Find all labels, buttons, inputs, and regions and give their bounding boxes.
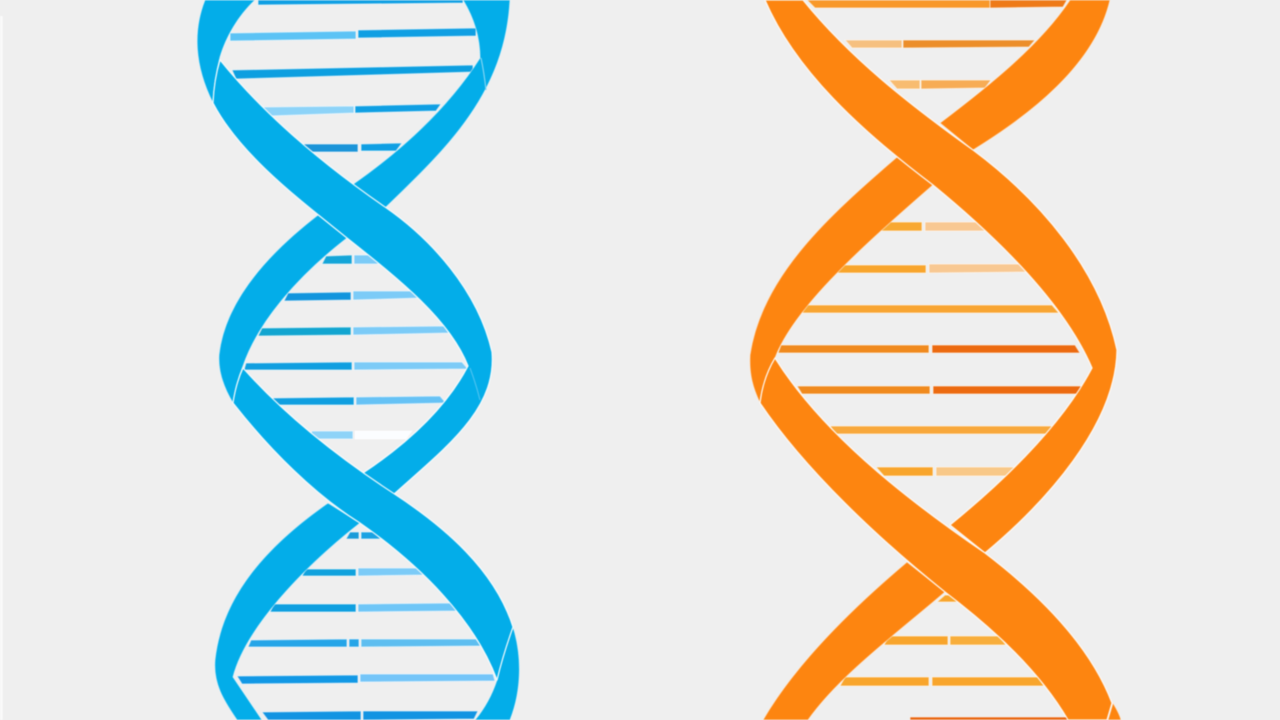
blue helix upper front ribbon: [213, 60, 492, 495]
orange DNA helix: [750, 0, 1121, 720]
blue strand seam highlights: [470, 58, 486, 400]
blue helix lower front ribbon: [233, 368, 513, 680]
orange helix upper front ribbon: [765, 0, 1117, 553]
blue helix base pairs: [230, 0, 495, 720]
orange helix base pairs: [778, 0, 1084, 720]
orange helix lower front ribbon: [760, 358, 1112, 720]
blue helix back strand segments: [197, 0, 519, 720]
orange helix back strand segments: [750, 0, 1121, 720]
blue DNA helix: [197, 0, 519, 720]
